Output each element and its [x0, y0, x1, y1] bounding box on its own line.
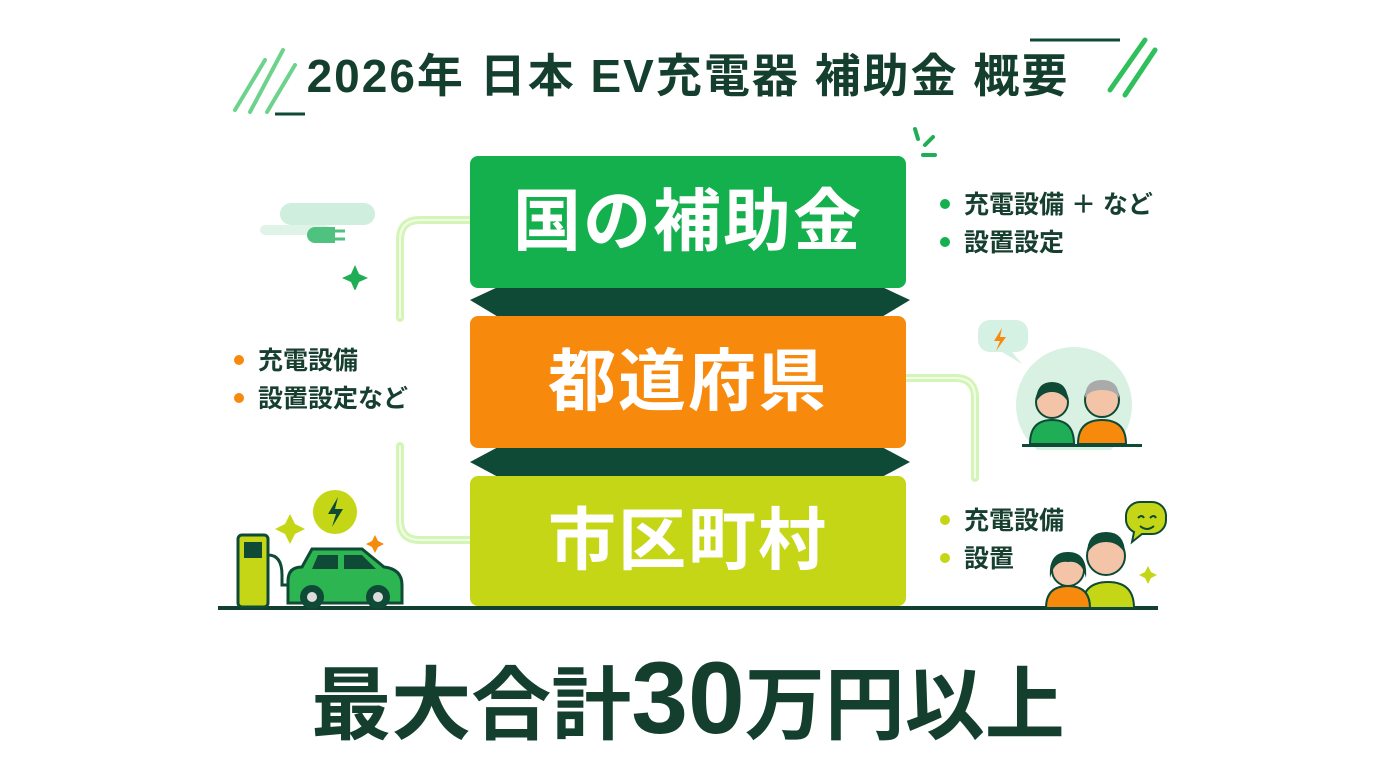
- box: prefecture: 都道府県: [548, 344, 828, 420]
- list: national: 設置設定: [964, 229, 1064, 257]
- list: national: [940, 191, 1153, 257]
- title decoration right: [1030, 38, 1158, 98]
- list: municipality: [940, 507, 1064, 573]
- list: prefecture: 充電設備: [258, 347, 358, 375]
- title: 2026年 日本 EV充電器 補助金 概要: [307, 50, 1069, 102]
- total amount: 最大合計30万円以上: [311, 641, 1065, 755]
- dark bands: [470, 288, 910, 476]
- list: municipality: 充電設備: [964, 507, 1064, 535]
- icon: sparkle lines: [912, 127, 937, 157]
- box: prefecture: [470, 316, 906, 448]
- title decoration left: [232, 48, 305, 116]
- icon: couple in circle: [978, 320, 1142, 450]
- icon: cloud plug: [260, 203, 375, 290]
- list: prefecture: 設置設定など: [258, 385, 408, 413]
- ground line: [218, 606, 1158, 610]
- list: national: 充電設備 ＋ など: [964, 191, 1153, 219]
- list: prefecture: [234, 347, 408, 413]
- icon: car charging: [236, 490, 404, 609]
- panel: stack: [470, 288, 910, 476]
- list: municipality: 設置: [964, 545, 1014, 573]
- icon: couple smiling: [1045, 501, 1167, 609]
- box: national: 国の補助金: [513, 184, 863, 260]
- box: municipality: [470, 476, 906, 606]
- box: national: [470, 156, 906, 288]
- box: municipality: 市区町村: [548, 503, 828, 579]
